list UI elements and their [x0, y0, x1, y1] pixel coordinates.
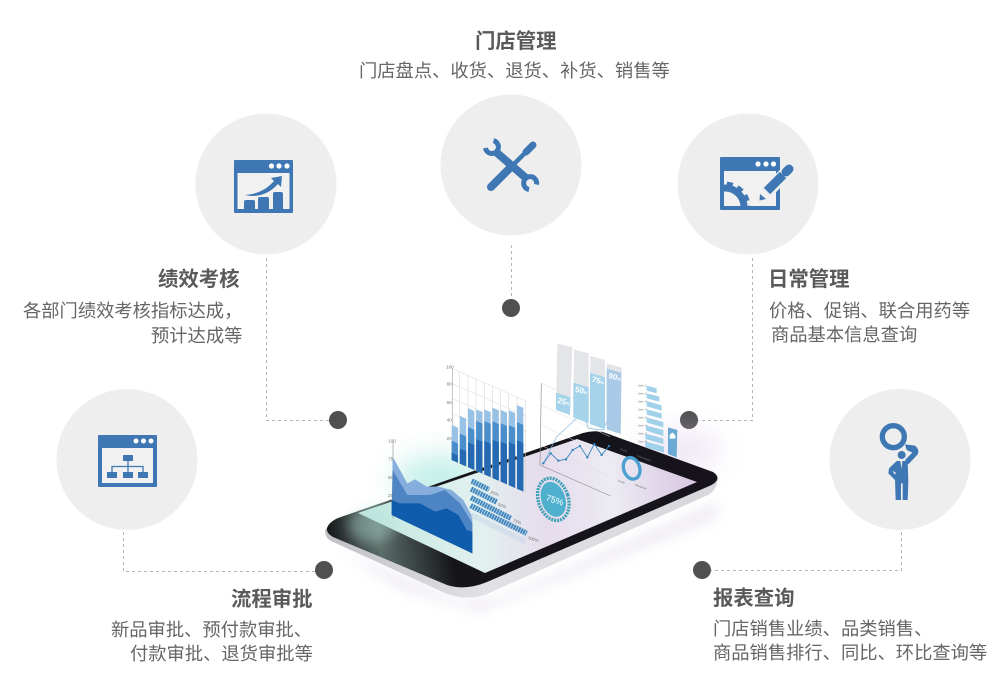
progress labels: 25% — [490, 490, 500, 497]
chart: area: 100 — [388, 439, 396, 444]
chart: horizontal bars: Item 3 — [638, 400, 647, 404]
chart: 75 percent gauge — [532, 474, 574, 525]
teal bezel highlight — [348, 507, 396, 543]
description: 门店盘点、收货、退货、补货、销售等 — [359, 60, 670, 81]
heading: 报表查询 — [713, 587, 795, 610]
node dot — [329, 411, 347, 429]
icon: person with magnifier — [882, 426, 918, 500]
heading: 日常管理 — [768, 268, 850, 291]
description: 价格、促销、联合用药等 — [769, 300, 970, 321]
chart: area: 50 — [388, 475, 394, 480]
card: home — [668, 427, 677, 457]
charts, drawn at 3x — [388, 343, 677, 553]
chart: grid bars — [446, 364, 527, 493]
chart: area: 25 — [388, 493, 394, 498]
description line 2: 商品基本信息查询 — [771, 324, 917, 345]
connector — [266, 258, 330, 420]
connector — [510, 245, 512, 300]
icon circle — [196, 114, 336, 254]
chart: horizontal bars: Item 8 — [638, 440, 647, 444]
description line 2: 付款审批、退货审批等 — [130, 643, 313, 664]
chart: percent columns: 75% — [591, 375, 606, 387]
glows and shadow — [340, 430, 720, 612]
chart: grid bars: 60 — [447, 400, 452, 405]
panel: reports — [693, 389, 987, 663]
panel: performance — [23, 114, 347, 429]
connector — [711, 532, 902, 570]
phone screen — [358, 439, 697, 573]
node dot — [693, 561, 711, 579]
chart: area: 75 — [388, 457, 394, 462]
chart: donut — [617, 447, 652, 491]
phone bezel — [327, 431, 718, 587]
chart: donut: Profit — [620, 447, 628, 453]
icon circle — [678, 114, 818, 254]
icon: growth chart window — [234, 160, 293, 213]
chart: percent columns: 90% — [608, 371, 622, 383]
chart: grid bars: 80 — [447, 382, 452, 387]
chart: horizontal bars: Item 4 — [638, 408, 647, 412]
panel: daily management — [678, 114, 970, 429]
chart: horizontal bars: Item 5 — [638, 416, 647, 420]
icon: tools — [486, 141, 537, 190]
chart: grid bars: 40 — [447, 418, 452, 423]
icon: gear and pencil window — [720, 157, 794, 210]
heading: 绩效考核 — [158, 267, 240, 291]
chart: horizontal bars: Item 2 — [638, 392, 647, 396]
chart: grid bars: 100 — [446, 364, 454, 369]
progress labels: 75% — [512, 518, 522, 526]
chart: donut: Revenue — [635, 483, 648, 491]
description: 门店销售业绩、品类销售、 — [713, 618, 932, 639]
chart: horizontal bars: Item 6 — [638, 424, 647, 428]
icon circle — [56, 389, 198, 530]
chart: donut: Profit — [617, 479, 625, 485]
node dot — [315, 561, 333, 579]
progress labels — [490, 490, 540, 543]
description line 2: 预计达成等 — [151, 325, 242, 346]
description: 新品审批、预付款审批、 — [111, 619, 312, 640]
chart: grid bars: 20 — [447, 436, 452, 441]
connector — [697, 258, 752, 420]
phone body — [325, 470, 718, 598]
progress labels: 100% — [527, 535, 540, 543]
heading: 流程审批 — [231, 587, 313, 611]
description: 各部门绩效考核指标达成， — [23, 300, 242, 321]
chart: horizontal bars: Item 1 — [638, 384, 647, 388]
chart: percent columns: 25% — [557, 396, 571, 408]
heading: 门店管理 — [475, 30, 557, 53]
node dot — [502, 299, 520, 317]
chart: percent columns — [556, 343, 622, 434]
chart: progress bars — [471, 481, 527, 542]
progress labels: 50% — [497, 502, 507, 510]
chart: area — [388, 439, 472, 553]
connector — [124, 532, 315, 572]
panel: workflow approval — [56, 389, 333, 664]
chart: donut: Investment — [636, 454, 652, 463]
icon: hierarchy window — [98, 435, 157, 487]
chart: percent columns: 50% — [574, 385, 589, 397]
chart: line — [540, 383, 611, 496]
icon circle — [440, 94, 582, 236]
chart: horizontal bars — [638, 384, 664, 453]
panel: top store management — [359, 30, 670, 317]
icon circle — [830, 389, 970, 530]
phone illustration — [325, 343, 720, 612]
node dot — [680, 411, 698, 429]
chart: horizontal bars: Item 7 — [638, 432, 647, 436]
gauge value: 75% — [545, 493, 565, 508]
description line 2: 商品销售排行、同比、环比查询等 — [713, 642, 987, 663]
